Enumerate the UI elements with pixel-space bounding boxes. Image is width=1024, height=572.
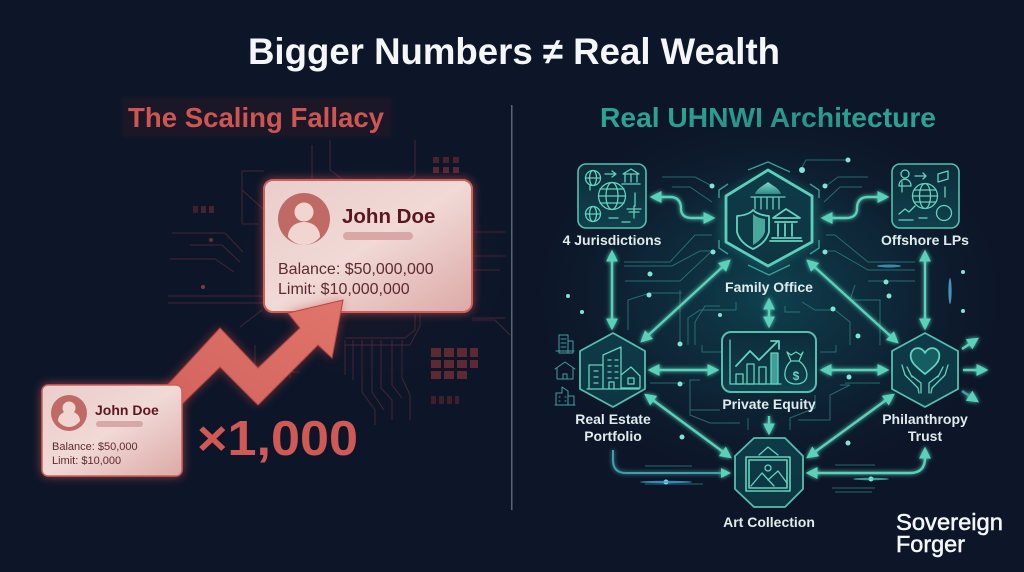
hexagon glow xyxy=(721,170,817,269)
hexagon xyxy=(580,333,645,407)
label: Trust xyxy=(908,428,942,444)
label: Private Equity xyxy=(722,396,816,412)
title: Bigger Numbers ≠ Real Wealth xyxy=(248,31,780,72)
label: Offshore LPs xyxy=(881,232,969,248)
connector arrows xyxy=(612,197,986,473)
balance and limit: Limit: $10,000 xyxy=(52,455,121,467)
balance and limit: Balance: $50,000,000 xyxy=(278,261,434,278)
node: offshore lps xyxy=(881,164,969,248)
growth arrow xyxy=(163,300,343,405)
placeholder bar xyxy=(343,232,413,240)
dollar sign on bag: $ xyxy=(793,369,800,383)
node: family office xyxy=(719,162,819,295)
label: Real Estate xyxy=(575,411,651,427)
icon: institution and shield xyxy=(737,182,802,249)
tile xyxy=(892,164,959,228)
tile xyxy=(578,164,646,228)
hexagon xyxy=(892,333,958,407)
icon: framed picture xyxy=(746,447,790,491)
avatar xyxy=(51,395,87,431)
panel: real uhnwi architecture xyxy=(524,100,1014,530)
node: 4 jurisdictions xyxy=(563,164,662,248)
small buildings xyxy=(555,335,575,405)
icon: rising chart and money bag xyxy=(730,340,807,384)
heading: real uhnwi architecture: Real UHNWI Architecture xyxy=(600,102,936,133)
panel: the scaling fallacy xyxy=(42,97,520,476)
multiplier: ×1,000 xyxy=(197,412,358,466)
label: 4 Jurisdictions xyxy=(563,232,662,248)
balance and limit xyxy=(278,261,434,298)
node: private equity xyxy=(722,332,816,412)
hexagon frame xyxy=(726,170,812,266)
placeholder bar xyxy=(96,421,143,427)
brand wordmark: Forger xyxy=(896,531,965,557)
brand wordmark: Sovereign xyxy=(896,509,1003,535)
node: philanthropy trust xyxy=(882,333,968,444)
balance and limit: Balance: $50,000 xyxy=(52,441,138,453)
tile xyxy=(722,332,816,392)
label: Art Collection xyxy=(723,514,815,530)
balance and limit: Limit: $10,000,000 xyxy=(278,281,410,298)
node: real estate portfolio xyxy=(555,333,651,444)
label: Portfolio xyxy=(584,428,642,444)
glow and circuit traces xyxy=(524,100,1014,492)
brand wordmark xyxy=(896,509,1003,557)
label xyxy=(882,411,968,444)
circuit board background xyxy=(168,140,520,425)
heading: the scaling fallacy: The Scaling Fallacy xyxy=(128,102,384,133)
octagon xyxy=(735,438,803,507)
label: Family Office xyxy=(725,279,813,295)
icon: heart in hands xyxy=(902,348,948,393)
card: large john doe xyxy=(264,180,472,312)
icon: buildings xyxy=(587,347,640,389)
node: art collection xyxy=(723,438,815,530)
icon: offshore flows xyxy=(899,170,952,220)
name: John Doe xyxy=(95,402,159,418)
balance and limit xyxy=(52,441,138,467)
divider xyxy=(511,105,512,510)
label xyxy=(575,411,651,444)
card: small john doe xyxy=(42,385,182,476)
label: Philanthropy xyxy=(882,411,968,427)
avatar xyxy=(278,193,330,245)
icon: globes and scales xyxy=(586,169,641,222)
name: John Doe xyxy=(342,205,435,228)
